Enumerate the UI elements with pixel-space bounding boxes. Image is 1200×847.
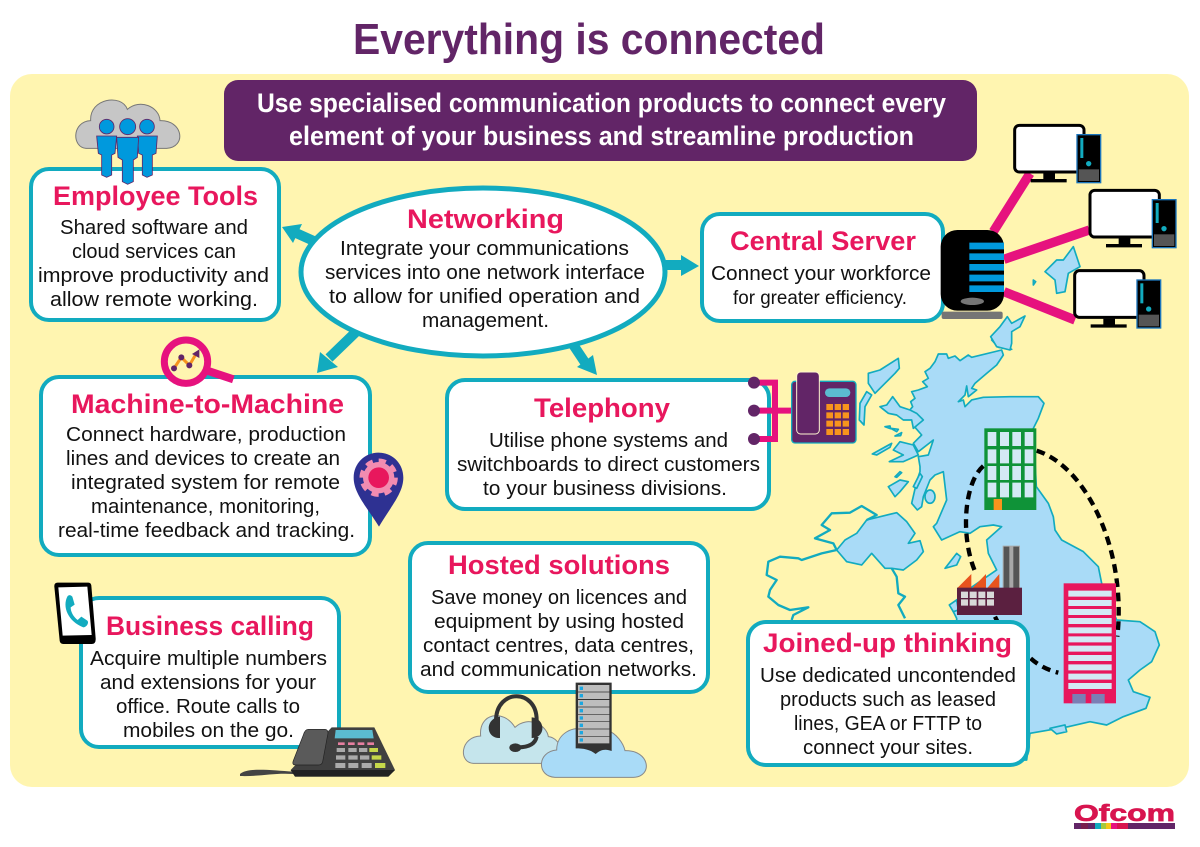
- panel: business calling: mobiles on the go.: [123, 720, 294, 742]
- map: Northern Ireland: [837, 513, 923, 570]
- logo: Ofcom: Ofcom: [1074, 800, 1175, 826]
- arrows from networking: [282, 224, 699, 375]
- icon: cloud headset and cloud server: [463, 683, 646, 777]
- panel: machine-to-machine: Connect hardware, production: [66, 424, 346, 446]
- icon: computer 2: [1090, 190, 1176, 248]
- map: dashed connection: [966, 451, 1119, 673]
- panel: employee tools: cloud services can: [72, 241, 236, 263]
- panel: telephony: Telephony: [534, 393, 670, 423]
- panel: machine-to-machine: real-time feedback and tracking.: [58, 520, 355, 542]
- panel: machine-to-machine: maintenance, monitoring,: [91, 496, 320, 518]
- banner: element of your business and streamline production: [289, 121, 914, 151]
- panel: networking: Networking: [407, 204, 564, 234]
- panel: central server: for greater efficiency.: [733, 288, 907, 309]
- panel: hosted solutions: [410, 543, 708, 692]
- icon: computer 1: [1015, 125, 1101, 183]
- map: Great Britain: [908, 350, 1159, 760]
- panel: networking: services into one network interface: [325, 262, 645, 284]
- panel: machine-to-machine: [41, 377, 370, 555]
- network diagram: [941, 125, 1176, 350]
- connecting lines: [993, 173, 1089, 320]
- panel: employee tools: [31, 169, 279, 320]
- panel: hosted solutions: Hosted solutions: [448, 550, 670, 580]
- icon: desk telephone: [240, 727, 395, 777]
- panel: employee tools: improve productivity and: [38, 265, 269, 287]
- panel: central server: [702, 214, 943, 321]
- panel: networking: Integrate your communications: [340, 238, 629, 260]
- icon: office telephone with connectors: [748, 372, 856, 445]
- panel: machine-to-machine: lines and devices to create an: [66, 448, 340, 470]
- panel: business calling: Business calling: [106, 611, 314, 641]
- icon: location gear pin: [354, 453, 403, 527]
- icon: green office: [984, 428, 1036, 510]
- banner: Use specialised communication products to connect every: [257, 88, 946, 118]
- panel: employee tools: Employee Tools: [53, 181, 258, 211]
- panel: machine-to-machine: Machine-to-Machine: [71, 389, 344, 419]
- panel: telephony: to your business divisions.: [483, 478, 727, 500]
- panel: business calling: [81, 598, 339, 747]
- panel: machine-to-machine: integrated system for remote: [71, 472, 340, 494]
- panel: telephony: [447, 380, 769, 509]
- shetland and orkney islands: [991, 247, 1080, 350]
- icon: red office: [1064, 583, 1116, 703]
- map: Ireland coastline: [767, 506, 905, 620]
- panel: telephony: switchboards to direct customers: [457, 454, 760, 476]
- panel: central server: Connect your workforce: [711, 263, 931, 285]
- map: UK and Ireland: [767, 340, 1159, 760]
- panel: networking: to allow for unified operation and: [329, 286, 640, 308]
- panel: joined-up thinking: lines, GEA or FTTP to: [794, 713, 982, 735]
- icon: computer 3: [1075, 271, 1161, 328]
- map: islands: [859, 340, 1067, 734]
- panel: joined-up thinking: products such as leased: [780, 689, 996, 711]
- panel: hosted solutions: equipment by using hosted: [434, 611, 684, 633]
- title: Everything is connected: [353, 15, 825, 64]
- panel: hosted solutions: contact centres, data centres,: [423, 635, 694, 657]
- icon: factory: [957, 546, 1022, 615]
- panel: hosted solutions: Save money on licences and: [431, 587, 687, 609]
- panel: business calling: Acquire multiple numbers: [90, 648, 327, 670]
- icon: magnifier chart: [164, 340, 233, 383]
- panel: joined-up thinking: Use dedicated uncontended: [760, 665, 1016, 687]
- icon: server: [941, 230, 1004, 319]
- panel: joined-up thinking: connect your sites.: [803, 737, 973, 759]
- icon: mobile phone: [54, 583, 96, 644]
- panel: networking: [301, 188, 665, 356]
- panel: employee tools: Shared software and: [60, 217, 248, 239]
- panel: telephony: Utilise phone systems and: [489, 430, 728, 452]
- panel: joined-up thinking: [748, 622, 1028, 765]
- panel: networking: management.: [422, 310, 549, 332]
- icon: cloud team: [76, 100, 180, 184]
- panel: central server: Central Server: [730, 226, 916, 256]
- panel: employee tools: allow remote working.: [50, 289, 258, 311]
- panel: business calling: and extensions for your: [100, 672, 316, 694]
- logo: Ofcom: [1074, 800, 1175, 829]
- panel: joined-up thinking: Joined-up thinking: [763, 628, 1012, 658]
- panel: business calling: office. Route calls to: [116, 696, 300, 718]
- banner: [224, 80, 977, 161]
- panel: hosted solutions: and communication networks.: [420, 659, 697, 681]
